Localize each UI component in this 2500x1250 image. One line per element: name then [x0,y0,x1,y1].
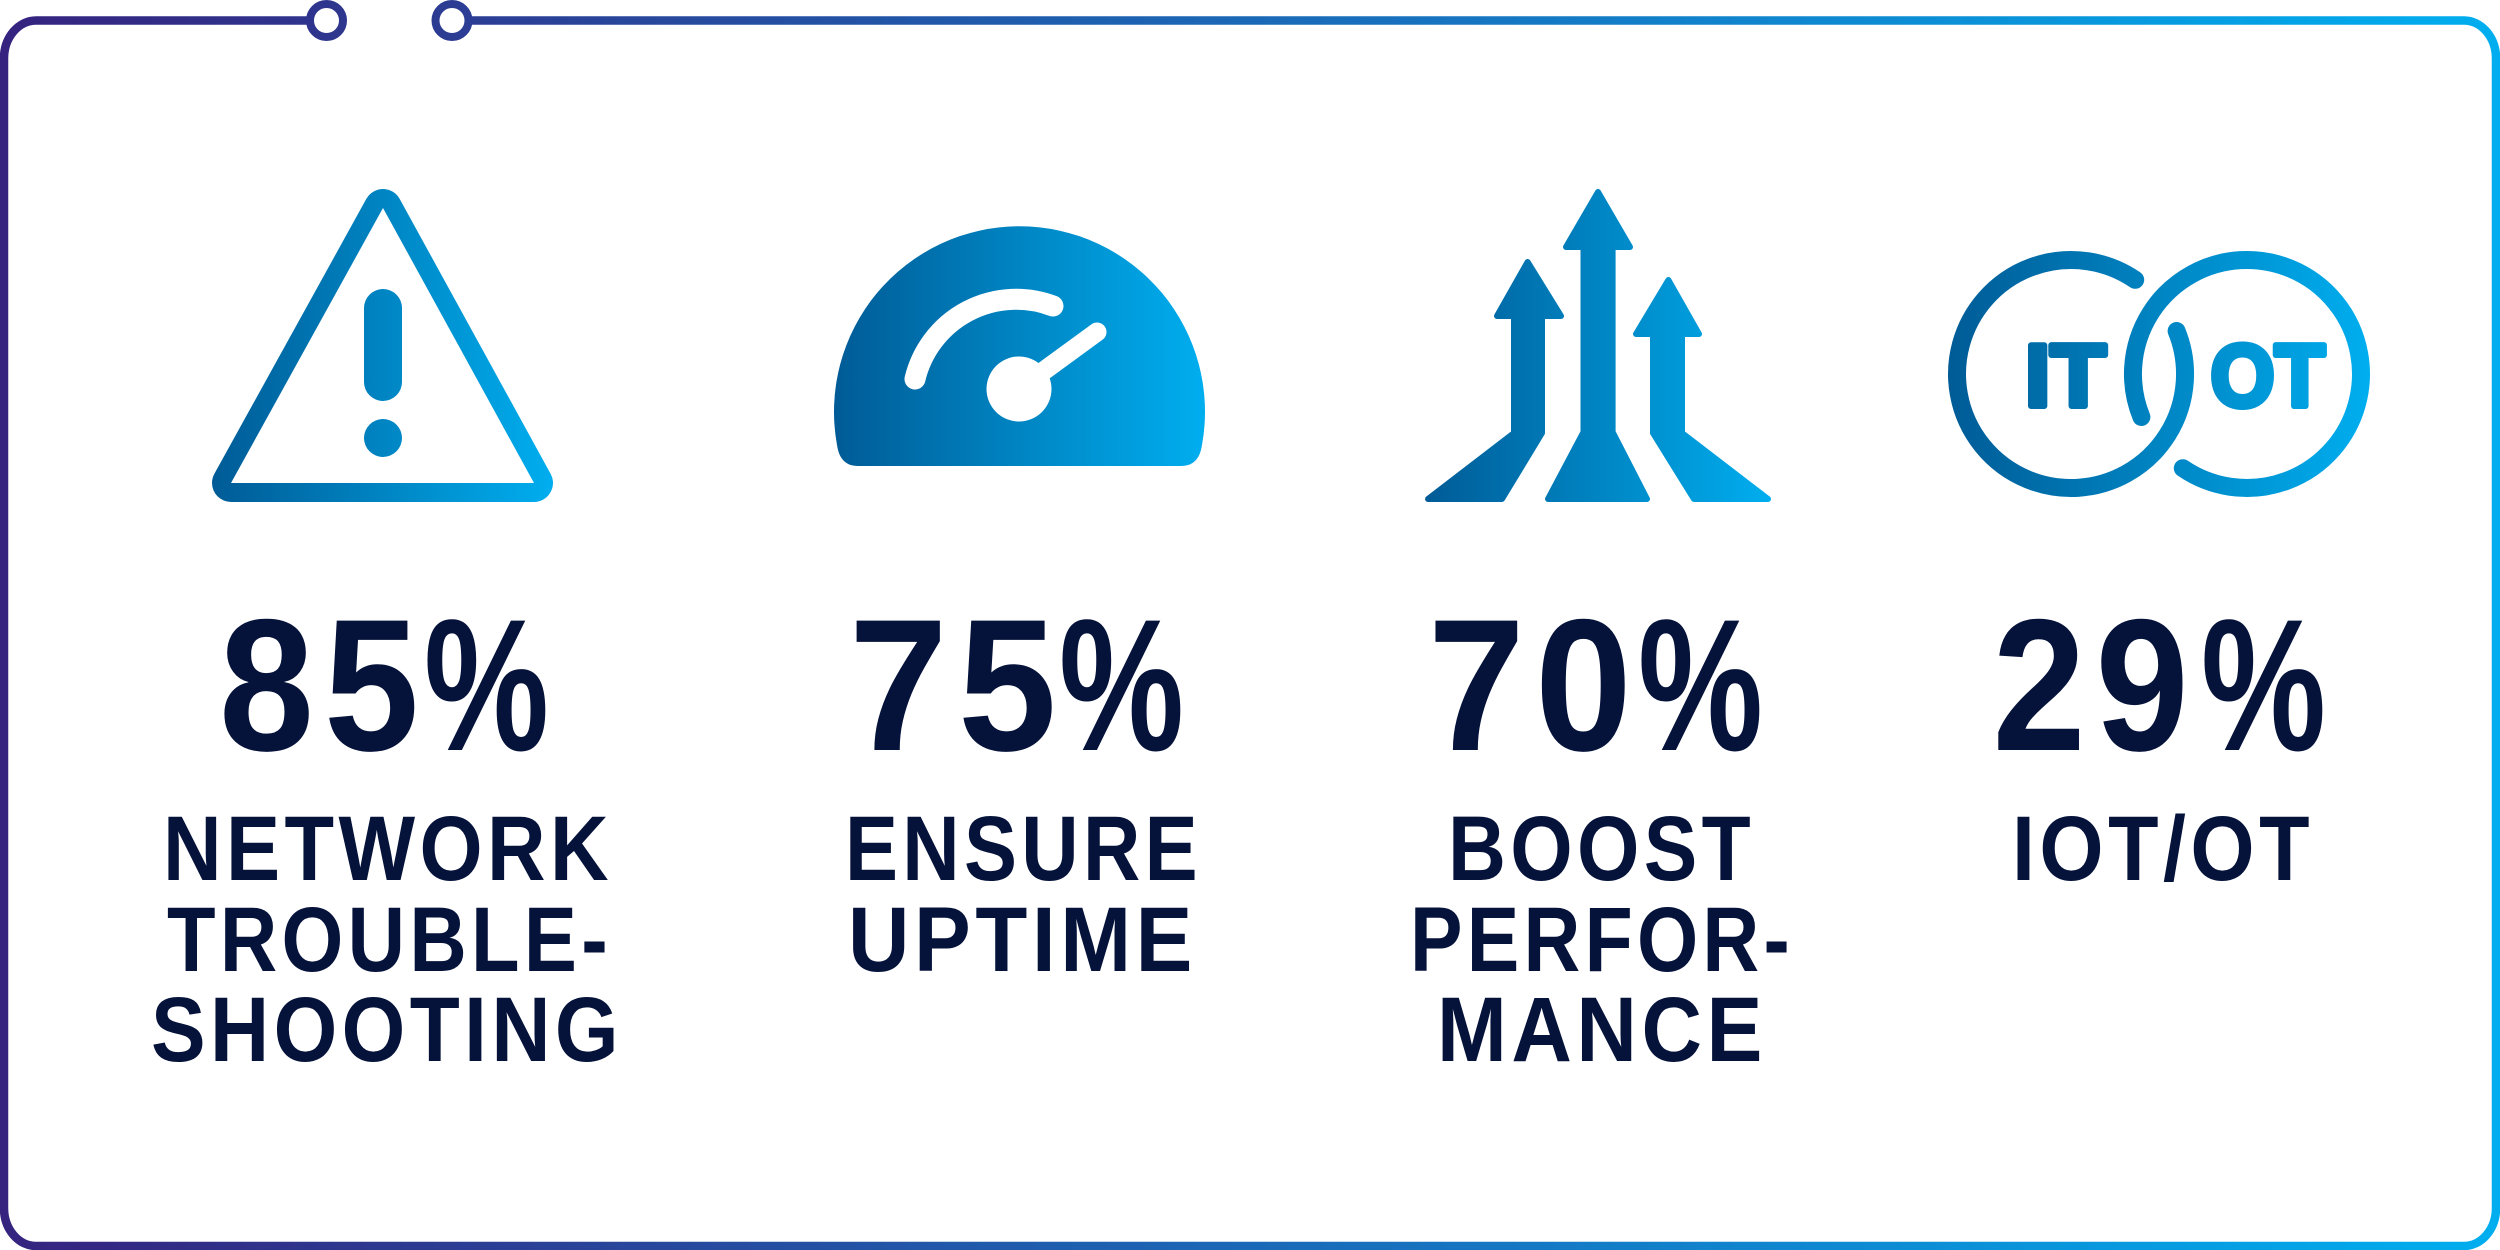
panel: network troubleshooting [151,208,623,1081]
label: boost perfor-mance: PERFOR- [1410,889,1794,991]
icon: linked IT and OT rings [1957,260,2361,488]
icon: linked IT and OT rings: OT [2210,326,2325,425]
stat: 70%: % [1638,580,1763,790]
label: boost perfor-mance: MANCE [1437,979,1767,1081]
stat: 85%: 85 [219,580,429,790]
label: iot/ot: IOT/OT [2012,798,2314,900]
stat: 85%: % [424,580,549,790]
label: network trouble-shooting: NETWORK [163,798,613,900]
label: network trouble-shooting [151,798,623,1081]
stat: 29%: 29 [1992,580,2198,790]
stat: 70%: 70 [1428,580,1642,790]
icon: three rising arrows [1428,192,1768,499]
stat: 75%: 75 [849,580,1067,790]
label: boost perfor-mance [1410,798,1794,1081]
icon: warning triangle [231,208,534,483]
label: network trouble-shooting: TROUBLE- [167,889,612,991]
stat: 29%: % [2201,580,2326,790]
label: ensure uptime: ENSURE [845,798,1202,900]
icon: speed gauge [834,226,1205,466]
panel: boost performance [1410,192,1794,1081]
label: ensure uptime: UPTIME [848,889,1197,991]
panel: iot/ot [1957,260,2361,900]
label: ensure uptime [845,798,1202,991]
panel: ensure uptime [834,226,1205,991]
icon: linked IT and OT rings: IT [2025,326,2106,425]
label: network trouble-shooting: SHOOTING [151,979,623,1081]
stat: 75%: % [1059,580,1184,790]
label: boost perfor-mance: BOOST [1448,798,1755,900]
